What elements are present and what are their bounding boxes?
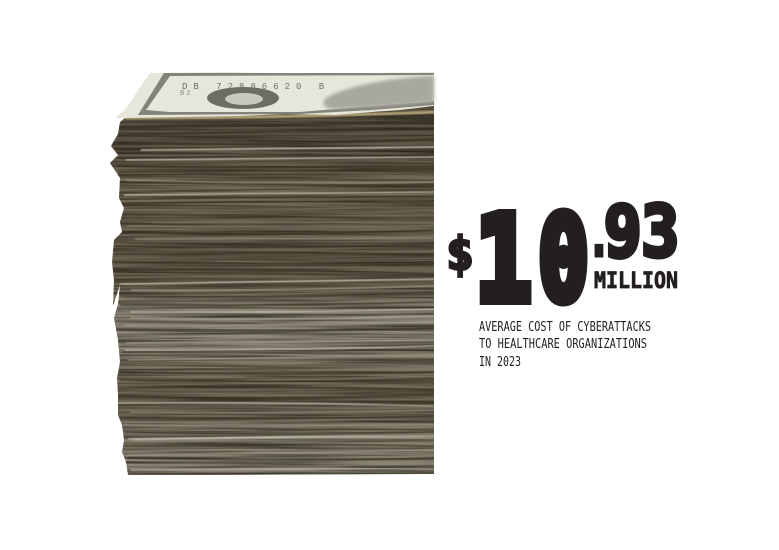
bill seal bbox=[207, 87, 279, 109]
bill serial number: DB 72886620 B bbox=[182, 82, 330, 92]
bill seal centre bbox=[225, 93, 263, 105]
statistic: $10.93 million bbox=[446, 190, 679, 328]
photo: stack of dollar bills bbox=[105, 72, 435, 477]
digit 0: 0 bbox=[538, 190, 589, 328]
bill series letters: B2 bbox=[180, 90, 192, 98]
top bill bbox=[115, 72, 434, 118]
bill printed border bbox=[138, 73, 434, 115]
caption: average cost of cyberattacks bbox=[479, 320, 651, 370]
word million: MILLION bbox=[594, 269, 678, 294]
caption line 3: IN 2023 bbox=[479, 355, 521, 370]
decimal point: . bbox=[584, 192, 614, 274]
digit 1: 1 bbox=[475, 190, 532, 328]
dollar sign: $ bbox=[446, 227, 474, 281]
bill paper bbox=[115, 72, 434, 118]
bill portrait bbox=[324, 76, 434, 109]
stack of bill edges bbox=[105, 105, 435, 477]
caption line 1: AVERAGE COST OF CYBERATTACKS bbox=[479, 320, 651, 335]
caption line 2: TO HEALTHCARE ORGANIZATIONS bbox=[479, 337, 647, 352]
decimals 93: 93 bbox=[604, 191, 679, 273]
